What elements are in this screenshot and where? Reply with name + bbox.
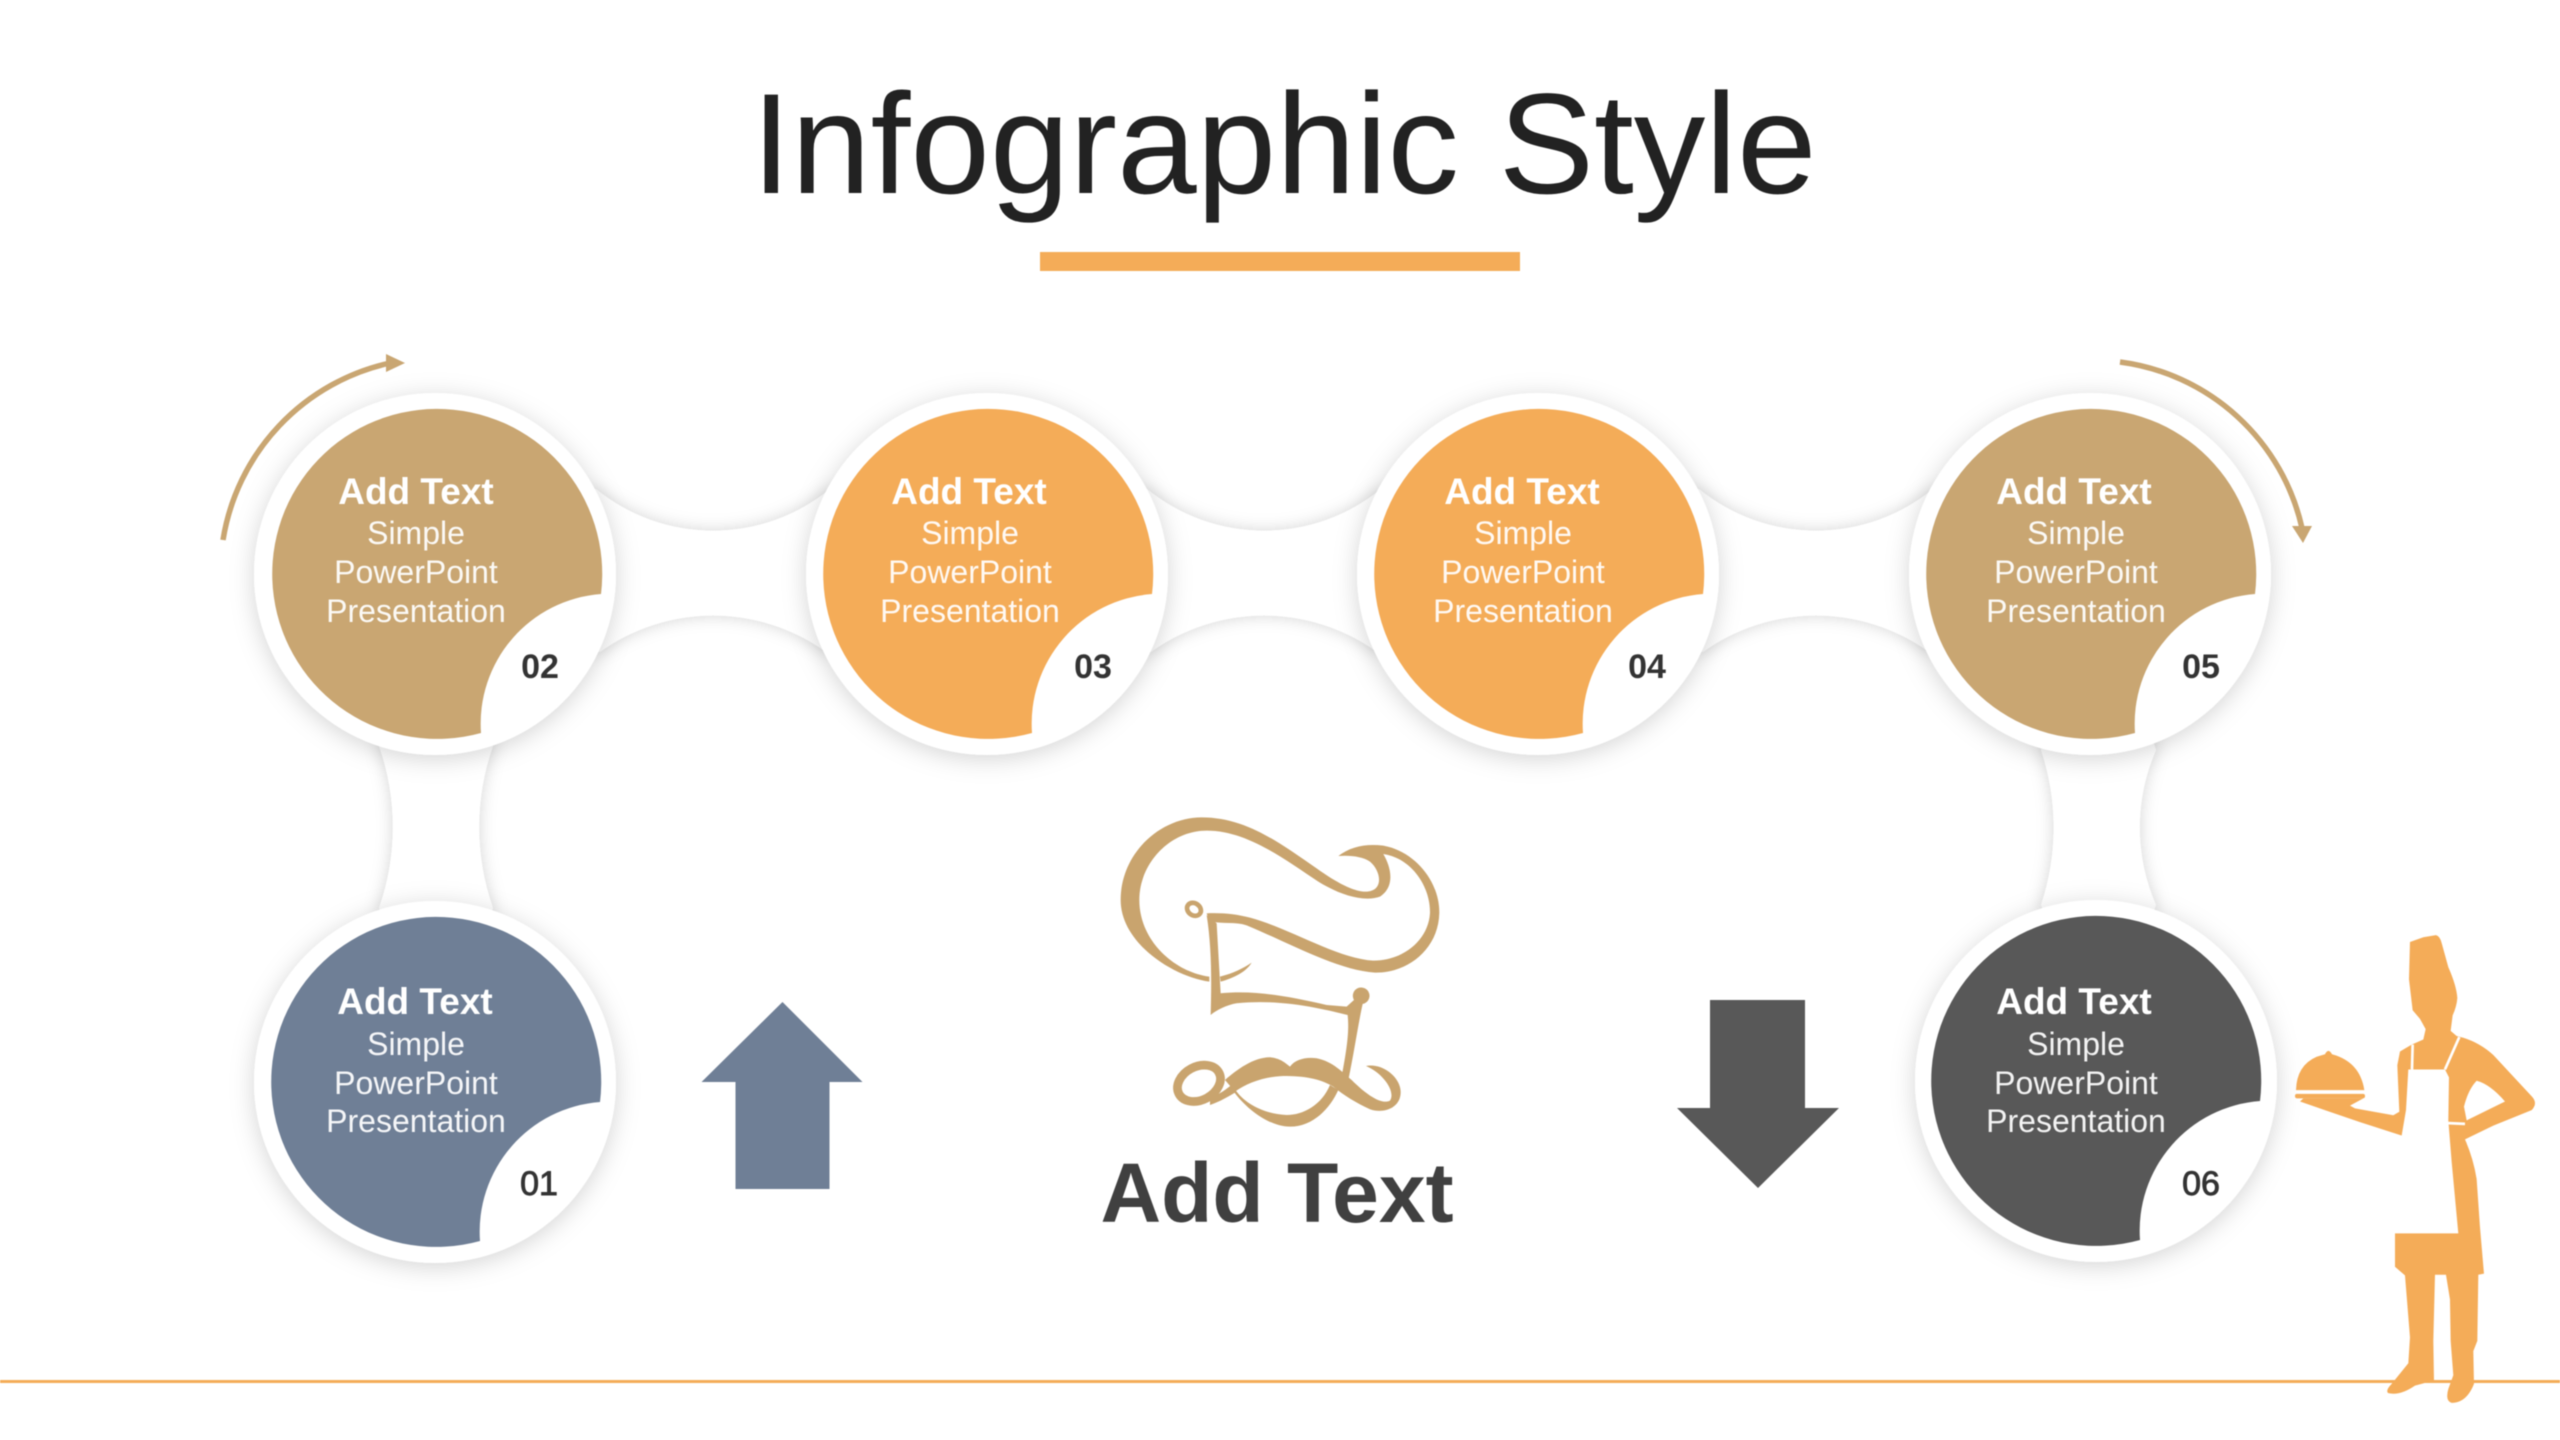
step 03: Add Text xyxy=(891,471,1047,512)
step 03: PowerPoint xyxy=(888,554,1052,590)
central label: Add Text xyxy=(1100,1146,1454,1240)
up arrow xyxy=(702,1002,862,1189)
apron straps xyxy=(2412,1037,2465,1124)
cloche plate xyxy=(2295,1094,2365,1098)
step 06: 06 xyxy=(2182,1165,2220,1203)
step 01: Simple xyxy=(367,1026,465,1062)
step 03: Simple xyxy=(921,515,1019,551)
apron xyxy=(2392,1069,2458,1233)
title: Infographic Style xyxy=(751,65,1817,224)
step 05: 05 xyxy=(2182,648,2220,686)
icon: chef hat and mustache logo xyxy=(1121,817,1439,1127)
step 02: Simple xyxy=(367,515,465,551)
connectors between step circles xyxy=(379,489,2156,950)
step 01: PowerPoint xyxy=(334,1065,498,1101)
step 05: PowerPoint xyxy=(1994,554,2158,590)
title underline xyxy=(1040,252,1520,271)
step 05: Presentation xyxy=(1986,593,2166,629)
curved arrow: left xyxy=(223,354,405,540)
step 01: 01 xyxy=(520,1165,558,1203)
step 05: Add Text xyxy=(1996,471,2152,512)
step 04 xyxy=(1357,393,1719,755)
step 02: Add Text xyxy=(338,471,494,512)
step 03: Presentation xyxy=(880,593,1060,629)
step 02: Presentation xyxy=(326,593,506,629)
cloche dome xyxy=(2296,1051,2364,1090)
step 03 xyxy=(806,393,1168,755)
curved arrow: right xyxy=(2120,362,2312,543)
step 04: PowerPoint xyxy=(1441,554,1605,590)
arm gap xyxy=(2464,1081,2505,1120)
step 02: 02 xyxy=(521,648,559,686)
down arrow xyxy=(1677,1000,1839,1188)
step 02 xyxy=(254,393,616,755)
step 03: 03 xyxy=(1074,648,1112,686)
step 01: Presentation xyxy=(326,1103,506,1139)
step 06: Simple xyxy=(2027,1026,2125,1062)
step 04: Presentation xyxy=(1433,593,1613,629)
icon: chef silhouette holding a cloche xyxy=(2295,935,2535,1403)
step 01 xyxy=(254,901,616,1263)
step 04: 04 xyxy=(1628,648,1666,686)
step 06: Add Text xyxy=(1996,981,2152,1022)
step 06 xyxy=(1915,900,2277,1262)
step 04: Add Text xyxy=(1444,471,1600,512)
step 02: PowerPoint xyxy=(334,554,498,590)
step 06: PowerPoint xyxy=(1994,1065,2158,1101)
floor line xyxy=(0,1380,2560,1383)
step 05: Simple xyxy=(2027,515,2125,551)
step 04: Simple xyxy=(1474,515,1572,551)
step 06: Presentation xyxy=(1986,1103,2166,1139)
step 05 xyxy=(1909,393,2271,755)
step 01: Add Text xyxy=(337,981,493,1022)
